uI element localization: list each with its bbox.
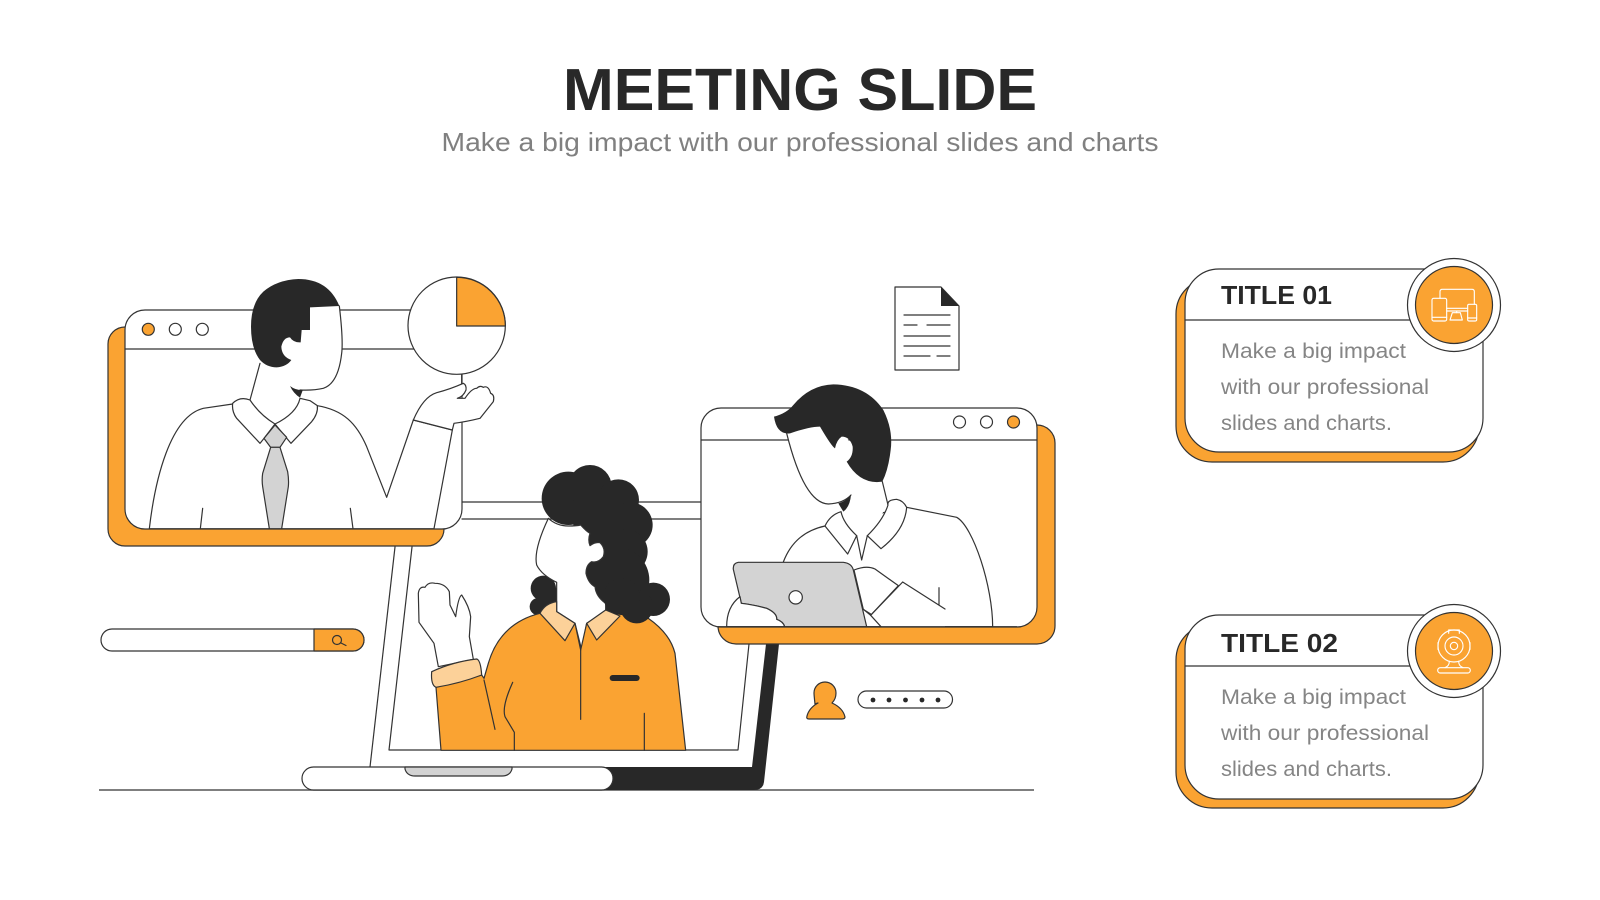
text block: Make a big impact — [1221, 685, 1406, 709]
window header line — [125, 348, 462, 350]
man with tablet — [718, 384, 1017, 627]
presenter figure — [149, 279, 494, 529]
window shadow panel — [718, 425, 1055, 644]
password field — [858, 691, 952, 708]
icon: user — [807, 682, 845, 719]
card divider — [1185, 665, 1425, 667]
presenter window — [108, 279, 494, 546]
search bar — [101, 629, 364, 651]
window header line — [701, 439, 1037, 441]
card body — [1185, 615, 1483, 799]
heading: TITLE 01 — [1221, 280, 1332, 310]
card shadow — [1176, 278, 1479, 462]
text block: with our professional — [1220, 375, 1429, 399]
icon: devices — [1408, 258, 1500, 352]
card divider — [1185, 319, 1425, 321]
text block: Make a big impact — [1221, 339, 1406, 363]
heading: TITLE 02 — [1221, 628, 1338, 658]
text block: slides and charts. — [1221, 411, 1392, 435]
window control dots — [142, 323, 208, 335]
text block: with our professional — [1220, 721, 1429, 745]
window frame — [125, 310, 462, 529]
icon: webcam — [1408, 604, 1500, 698]
colleague window — [701, 384, 1055, 644]
subtitle: Make a big impact with our professional slides and charts — [442, 127, 1158, 157]
card body — [1185, 269, 1483, 452]
icon: document — [895, 287, 959, 370]
pie chart — [408, 277, 505, 374]
laptop — [302, 502, 779, 790]
text block: slides and charts. — [1221, 757, 1392, 781]
card shadow — [1176, 624, 1479, 808]
ground line — [99, 789, 1034, 791]
woman in orange shirt — [418, 465, 686, 750]
panel: title 02 — [1176, 604, 1500, 808]
title: MEETING SLIDE — [563, 57, 1037, 123]
window shadow panel — [108, 327, 444, 546]
panel: title 01 — [1176, 258, 1500, 462]
window control dots — [954, 416, 1020, 428]
icon: magnifier — [332, 636, 346, 646]
window frame — [701, 408, 1037, 627]
